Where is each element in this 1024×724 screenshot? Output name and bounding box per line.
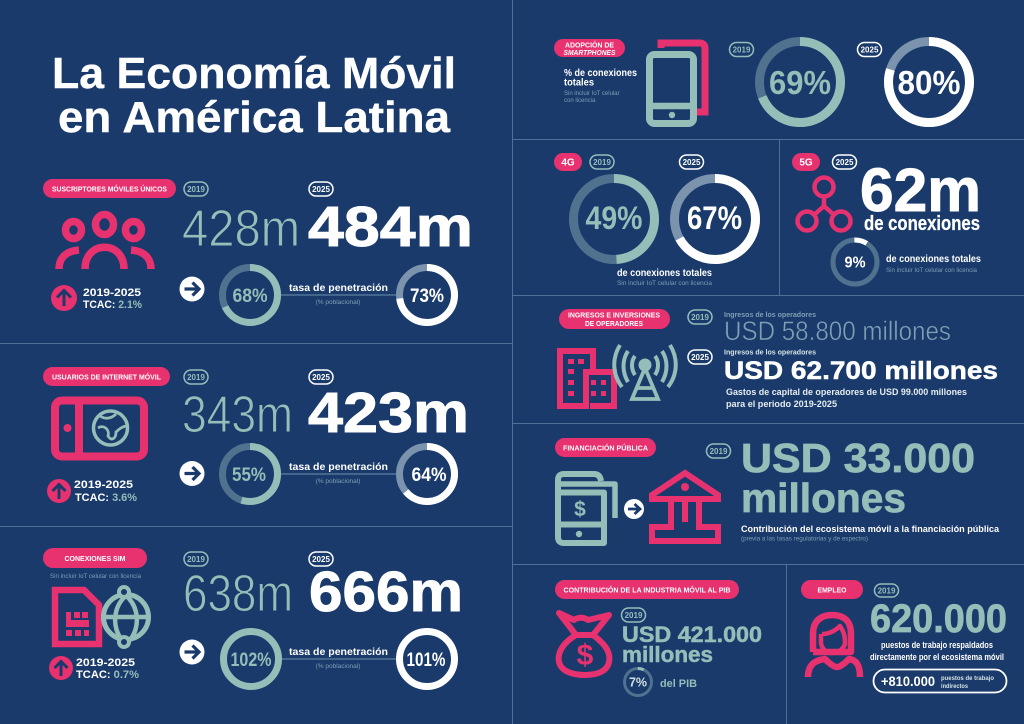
- label pill: [43, 367, 170, 386]
- penetration label: tasa de penetración: [289, 282, 388, 294]
- icon: phone payment: $: [574, 498, 586, 521]
- label pill: 5G: [799, 158, 813, 168]
- value 2025: 666m: [309, 560, 463, 624]
- capex note: para el periodo 2019-2025: [726, 399, 837, 409]
- panel: financiación pública: [555, 435, 1000, 543]
- year tag 2025: 2025: [861, 46, 879, 54]
- year tags: 2019: [593, 158, 611, 167]
- caption: del PIB: [660, 678, 697, 690]
- year tag: [874, 584, 898, 597]
- year tags: [184, 370, 333, 384]
- year tag 2019: [730, 42, 754, 56]
- note: Sin incluir IoT celular con licencia: [50, 573, 141, 580]
- title: en América Latina: [58, 93, 451, 142]
- year tag: [706, 444, 730, 458]
- donut 64%: 64%: [412, 465, 447, 486]
- growth rate: TCAC: 3.6%: [75, 492, 137, 504]
- year tags: 2025: [312, 185, 330, 194]
- donut 101%: [400, 632, 454, 686]
- year tags: [688, 310, 712, 364]
- penetration label: tasa de penetración: [289, 646, 388, 658]
- icon: phone with globe: [55, 400, 144, 457]
- value: millones: [622, 642, 713, 667]
- donut 7%: 7%: [629, 676, 647, 690]
- year tags: 2025: [691, 353, 709, 362]
- panel: contribución al PIB: [555, 580, 762, 696]
- growth rate: [49, 656, 139, 681]
- label pill: [43, 548, 147, 568]
- year tag: [622, 608, 646, 622]
- penetration label: [281, 282, 397, 306]
- indirect jobs callout: [874, 670, 1006, 692]
- label pill: USUARIOS DE INTERNET MÓVIL: [52, 372, 161, 382]
- icon: antenna: [614, 345, 676, 399]
- growth rate: TCAC: 0.7%: [76, 669, 139, 681]
- year tag: [832, 155, 856, 169]
- panel: empleo: [801, 580, 1007, 692]
- panel: adopción de smartphones: [554, 39, 970, 124]
- growth rate: 2019-2025: [76, 657, 135, 669]
- year tags: 2019: [187, 185, 205, 194]
- donut 67%: [674, 178, 756, 260]
- caption: % de conexiones: [564, 67, 637, 79]
- icon: money bag: $: [577, 639, 594, 672]
- year tags: 2019: [691, 313, 709, 322]
- capex note: Gastos de capital de operadores de USD 99.000 millones: [726, 387, 967, 397]
- panel: ingresos e inversiones: [557, 309, 998, 409]
- panel: usuarios de internet móvil: [43, 367, 469, 504]
- label pill: INGRESOS E INVERSIONES: [568, 312, 660, 320]
- revenue 2025: USD 62.700 millones: [724, 357, 998, 385]
- title: La Economía Móvil: [52, 49, 456, 98]
- icon: money bag: [559, 613, 609, 675]
- donut 73%: 73%: [410, 286, 444, 307]
- value: [741, 435, 975, 521]
- indirect jobs callout: puestos de trabajo: [941, 675, 994, 682]
- caption: Sin incluir IoT celular: [564, 91, 620, 97]
- caption: de conexiones totales: [886, 254, 981, 265]
- penetration label: (% poblacional): [316, 663, 360, 670]
- donut 67%: 67%: [687, 200, 742, 236]
- label pill: DE OPERADORES: [585, 321, 643, 328]
- penetration label: tasa de penetración: [289, 461, 388, 473]
- year tag: 2019: [625, 611, 643, 620]
- year tags: [590, 155, 704, 169]
- title: [52, 49, 456, 142]
- year tag 2019: 2019: [733, 46, 751, 54]
- label pill: CONTRIBUCIÓN DE LA INDUSTRIA MÓVIL AL PIB: [564, 586, 731, 594]
- value caption: de conexiones: [864, 213, 980, 235]
- icon: people: [59, 214, 151, 269]
- value: millones: [741, 475, 906, 521]
- value 2025: 423m: [308, 381, 469, 445]
- icon: phone payment: [558, 474, 615, 543]
- label pill: [555, 438, 656, 457]
- value: [622, 622, 762, 667]
- indirect jobs callout: +810.000: [881, 674, 935, 689]
- donut 68%: 68%: [232, 286, 268, 307]
- year tags: [184, 552, 333, 566]
- label pill: [559, 309, 670, 329]
- panel: 5G: [792, 153, 981, 284]
- icon: smartphone: [649, 43, 705, 124]
- growth rate: 2019-2025: [74, 479, 133, 491]
- label pill: 4G: [561, 158, 575, 168]
- arrow: [180, 276, 204, 302]
- year tags: 2025: [683, 158, 701, 167]
- value: USD 33.000: [741, 435, 975, 481]
- value 2025: 484m: [308, 195, 473, 259]
- caption: puestos de trabajo respaldados: [881, 640, 993, 651]
- year tag: 2019: [878, 586, 896, 596]
- donut 55%: [222, 446, 278, 502]
- revenue 2019: Ingresos de los operadores: [724, 310, 816, 319]
- revenue 2025: [724, 348, 998, 385]
- caption: (previa a las tasas regulatorias y de espectro): [741, 536, 868, 542]
- donut 69%: [760, 42, 840, 122]
- donut 68%: [222, 268, 278, 322]
- caption: [617, 268, 713, 287]
- panel: conexiones SIM: [43, 548, 463, 686]
- arrow: [624, 499, 644, 519]
- caption: con licencia: [564, 98, 596, 104]
- icon: person: [808, 615, 860, 677]
- year tag: 2025: [836, 158, 854, 167]
- value: USD 421.000: [622, 622, 762, 647]
- growth rate: [47, 479, 137, 504]
- year tags: 2019: [187, 555, 205, 564]
- year tag: 2019: [710, 447, 728, 456]
- arrow: [180, 461, 204, 486]
- label pill: FINANCIACIÓN PÚBLICA: [563, 444, 649, 452]
- donut 9%: 9%: [844, 254, 866, 272]
- growth rate: [51, 285, 142, 311]
- donut 80%: 80%: [898, 64, 960, 101]
- label pill: EMPLEO: [818, 586, 847, 594]
- penetration label: (% poblacional): [316, 478, 360, 485]
- label pill: [554, 153, 582, 171]
- penetration label: (% poblacional): [316, 299, 360, 306]
- caption: Sin incluir IoT celular con licencia: [617, 281, 713, 287]
- label pill: [555, 580, 739, 599]
- icon: SIM and globe: [55, 587, 149, 647]
- panel: 4G: [554, 153, 756, 287]
- arrow: [180, 640, 204, 664]
- donut 102%: [224, 632, 278, 686]
- icon: bank: [652, 473, 718, 541]
- caption: [870, 640, 1004, 663]
- panel: suscriptores móviles únicos: [43, 179, 473, 322]
- label pill: CONEXIONES SIM: [64, 554, 126, 563]
- capex note: [726, 387, 967, 409]
- donut 80%: [888, 42, 970, 122]
- icon: buildings: [557, 348, 617, 409]
- label pill: [554, 39, 625, 57]
- caption: totales: [564, 76, 594, 88]
- donut 55%: 55%: [232, 465, 266, 486]
- icon: 5G network: [798, 178, 850, 230]
- indirect jobs callout: indirectos: [941, 683, 968, 690]
- label pill: [792, 153, 820, 171]
- label pill: [801, 580, 863, 599]
- value 2019: 638m: [183, 565, 293, 623]
- donut 102%: 102%: [230, 650, 272, 671]
- year tags: 2025: [312, 373, 330, 382]
- donut 49%: 49%: [586, 200, 642, 236]
- caption: Contribución del ecosistema móvil a la financiación pública: [741, 524, 1000, 535]
- donut 73%: [400, 268, 454, 322]
- year tags: 2025: [312, 555, 330, 564]
- penetration label: [281, 461, 397, 485]
- value 62m: 62m: [860, 156, 981, 224]
- year tags: [184, 182, 333, 196]
- label pill: SMARTPHONES: [564, 50, 616, 57]
- caption: [886, 254, 981, 274]
- caption: de conexiones totales: [617, 268, 712, 279]
- penetration label: [281, 646, 397, 670]
- label pill: [43, 179, 176, 198]
- label pill: SUSCRIPTORES MÓVILES ÚNICOS: [52, 184, 167, 194]
- donut 64%: [400, 446, 454, 502]
- caption: [741, 524, 1000, 542]
- growth rate: TCAC: 2.1%: [83, 299, 142, 311]
- revenue 2019: USD 58.800 millones: [724, 316, 951, 346]
- year tags: 2019: [187, 373, 205, 382]
- revenue 2025: Ingresos de los operadores: [724, 348, 816, 356]
- caption: Sin incluir IoT celular con licencia: [886, 268, 978, 274]
- value 2019: 428m: [182, 200, 300, 258]
- donut 69%: 69%: [769, 64, 831, 101]
- growth rate: 2019-2025: [83, 287, 141, 299]
- donut 7%: [624, 668, 652, 696]
- value 2019: 343m: [182, 386, 293, 444]
- caption: [564, 67, 637, 104]
- value: 620.000: [870, 597, 1007, 641]
- donut 49%: [574, 178, 654, 260]
- donut 101%: 101%: [406, 650, 446, 671]
- donut 9%: [833, 240, 877, 284]
- year tag 2025: [858, 42, 882, 56]
- label pill: ADOPCIÓN DE: [565, 40, 614, 50]
